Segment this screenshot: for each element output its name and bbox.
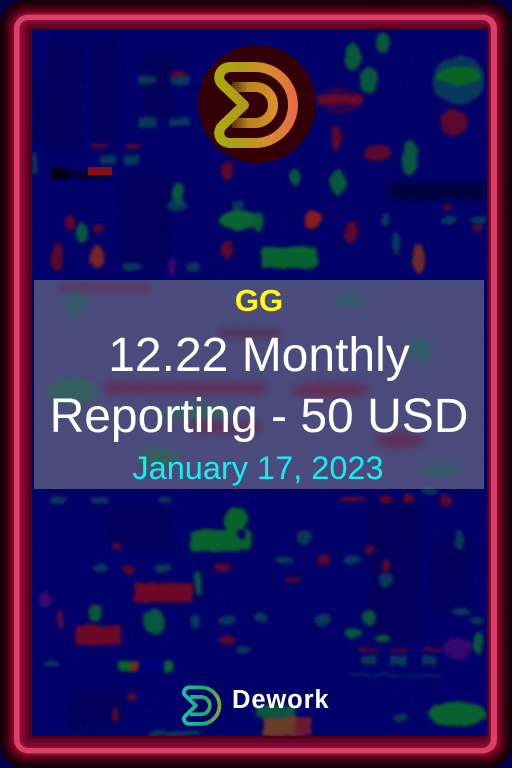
- icon: footer Dework logo: [184, 687, 219, 724]
- dark bar: [52, 167, 112, 180]
- dark hole: [138, 659, 165, 672]
- panel tint patches: [47, 285, 460, 478]
- dark patches: [32, 40, 487, 730]
- title: second line: Reporting - 50 USD: [50, 390, 468, 443]
- heading: GG: GG: [235, 283, 283, 318]
- title: first line: 12.22 Monthly: [108, 329, 410, 382]
- date: January 17, 2023: [132, 450, 384, 486]
- icon: top Dework logo: [198, 45, 316, 163]
- footer wordmark: Dework: [232, 686, 330, 714]
- panel: title band: [34, 280, 484, 489]
